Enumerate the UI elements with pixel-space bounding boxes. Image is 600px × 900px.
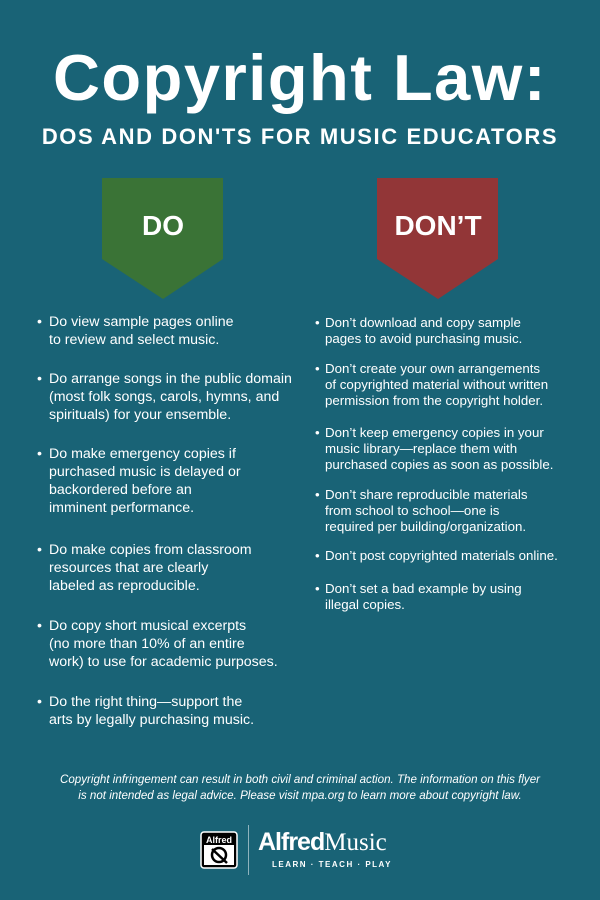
list: do: spirituals) for your ensemble. xyxy=(49,407,231,423)
banner: do: DO xyxy=(142,210,184,241)
list: do: to review and select music. xyxy=(49,332,219,348)
list: do: Do make emergency copies if xyxy=(49,446,236,462)
footer note xyxy=(60,773,540,802)
list: dont: • xyxy=(315,315,320,330)
banner: dont: DON’T xyxy=(394,210,482,241)
list: dont: from school to school—one is xyxy=(325,503,499,518)
list: do: purchased music is delayed or xyxy=(49,464,241,480)
list: dont: • xyxy=(315,581,320,596)
list: dont: • xyxy=(315,548,320,563)
list: dont: required per building/organization. xyxy=(325,519,526,534)
list: dont xyxy=(315,315,558,612)
list: dont: illegal copies. xyxy=(325,597,405,612)
list: do: Do copy short musical excerpts xyxy=(49,618,246,634)
icon: alfred badge: Alfred xyxy=(206,835,232,845)
list: do: (no more than 10% of an entire xyxy=(49,636,245,652)
list: do: • xyxy=(37,371,42,387)
subtitle: DOS AND DON'TS FOR MUSIC EDUCATORS xyxy=(42,124,558,149)
list: dont: • xyxy=(315,361,320,376)
list: do: (most folk songs, carols, hymns, and xyxy=(49,389,279,405)
list: dont: music library—replace them with xyxy=(325,441,517,456)
list: do: imminent performance. xyxy=(49,500,194,516)
list: dont: Don’t set a bad example by using xyxy=(325,581,522,596)
list: do xyxy=(37,314,292,728)
list: do: Do view sample pages online xyxy=(49,314,234,330)
list: dont: • xyxy=(315,487,320,502)
list: dont: of copyrighted material without written xyxy=(325,377,548,392)
banner: do xyxy=(102,178,223,299)
list: dont: Don’t keep emergency copies in your xyxy=(325,425,544,440)
footer note: Copyright infringement can result in both civil and criminal action. The information on this flyer xyxy=(60,773,540,786)
list: dont: purchased copies as soon as possible. xyxy=(325,457,553,472)
list: dont: pages to avoid purchasing music. xyxy=(325,331,522,346)
list: do: • xyxy=(37,618,42,634)
list: dont: Don’t share reproducible materials xyxy=(325,487,528,502)
list: dont: Don’t post copyrighted materials online. xyxy=(325,548,558,563)
list: do: • xyxy=(37,314,42,330)
list: dont: • xyxy=(315,425,320,440)
banner: dont xyxy=(377,178,498,299)
title: Copyright Law: xyxy=(53,41,547,114)
icon: alfred badge xyxy=(200,831,238,869)
list: do: • xyxy=(37,542,42,558)
logo: alfred music xyxy=(200,825,392,875)
list: do: backordered before an xyxy=(49,482,192,498)
list: do: Do arrange songs in the public domain xyxy=(49,371,292,387)
list: do: work) to use for academic purposes. xyxy=(49,654,278,670)
list: dont: Don’t download and copy sample xyxy=(325,315,521,330)
list: do: arts by legally purchasing music. xyxy=(49,712,254,728)
list: dont: permission from the copyright holder. xyxy=(325,393,543,408)
list: do: resources that are clearly xyxy=(49,560,208,576)
footer note: is not intended as legal advice. Please visit mpa.org to learn more about copyright law. xyxy=(78,789,522,802)
list: do: Do make copies from classroom xyxy=(49,542,252,558)
logo: alfred music: LEARN · TEACH · PLAY xyxy=(272,860,392,869)
list: do: • xyxy=(37,694,42,710)
list: dont: Don’t create your own arrangements xyxy=(325,361,540,376)
wordmark: AlfredMusic xyxy=(258,828,387,856)
list: do: labeled as reproducible. xyxy=(49,578,200,594)
list: do: Do the right thing—support the xyxy=(49,694,242,710)
list: do: • xyxy=(37,446,42,462)
